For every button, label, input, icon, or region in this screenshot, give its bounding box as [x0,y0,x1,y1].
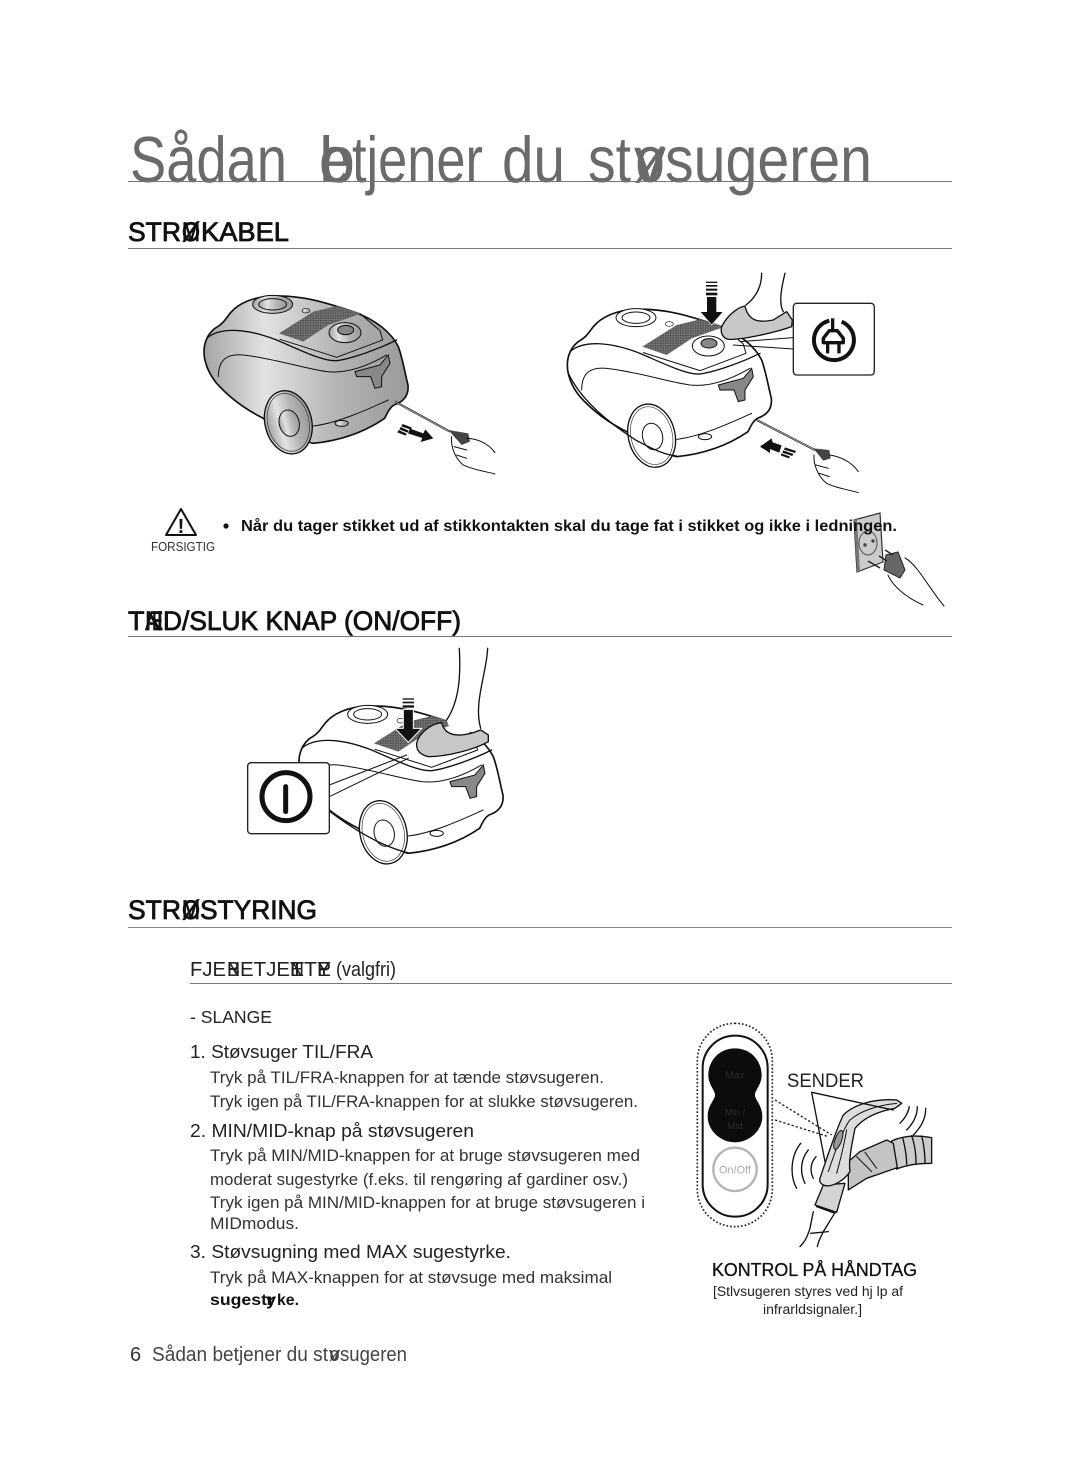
leg and shoe [417,648,488,757]
instructions: y [266,1292,276,1309]
arrow: retract [760,438,796,458]
subheading: remote type: N [227,959,240,981]
title: v [634,123,666,196]
instructions: Tryk igen på TIL/FRA-knappen for at slukke støvsugeren. [210,1093,638,1111]
heading: Tænd/sluk knap: D/SLUK KNAP (ON/OFF) [163,606,461,636]
heading: Tænd/sluk knap [128,606,952,637]
footer: 6 [130,1344,141,1366]
footer: sugeren [340,1344,407,1366]
title: tjener [352,123,483,196]
heading: Strømstyring: M [182,895,200,925]
remote button panel: Mid [727,1121,743,1131]
arrow: press down [700,282,723,325]
subheading: remote type: R [227,959,240,981]
illustration: retracting the power cord with foot [567,273,874,493]
caution icon and label: FORSIGTIG [151,539,215,554]
subheading: remote type: FJE [190,959,226,981]
instructions: r [266,1292,276,1309]
title: sugeren [665,123,872,196]
instructions: 2. MIN/MID-knap på støvsugeren [190,1120,474,1141]
subheading: remote type: E [317,959,331,981]
subheading: remote type: N [290,959,304,981]
signal waves [792,1107,926,1188]
instructions: Tryk på MIN/MID-knappen for at bruge støvsugeren med [210,1147,640,1165]
caption: handle control: [Stlvsugeren styres ved hj lp af [713,1284,903,1299]
heading: Strømstyring: STR [128,895,181,925]
title: du [502,123,565,196]
caption: handle control: infrarldsignaler.] [763,1302,862,1317]
instructions: MIDmodus. [210,1215,299,1233]
heading: Strømkabel: KABEL [201,217,289,247]
cord and plug [395,402,470,445]
leg and shoe [721,273,792,339]
footer: ø [329,1344,340,1366]
footer: Sådan betjener du st [152,1344,328,1366]
subheading: remote type [190,959,952,984]
illustration: wall socket and hand pulling plug [854,513,944,606]
subheading: remote type: B [227,959,240,981]
remote button panel: Min / [725,1108,746,1118]
subheading: remote type: P [317,959,331,981]
caption: handle control [712,1259,917,1317]
subheading: remote type: ETJE [240,959,290,981]
title: ø [634,123,666,196]
remote button panel [697,1023,772,1227]
caption: handle control: KONTROL PÅ HÅNDTAG [712,1259,917,1280]
heading: Strømkabel: Ø [182,217,200,247]
caution icon and label [151,509,215,554]
text: slange label: - SLANGE [190,1007,272,1027]
sender pointer lines [812,1092,893,1162]
label: sender: SENDER [787,1071,864,1092]
subheading: remote type: (valgfri) [336,959,396,981]
heading: Tænd/sluk knap: N [145,606,163,636]
heading: Tænd/sluk knap: T [128,606,144,636]
instructions [190,1041,645,1309]
instructions: Tryk på MAX-knappen for at støvsuge med maksimal [210,1269,612,1287]
illustration: pulling out the power cord [204,295,495,474]
subheading: remote type: T [304,959,317,981]
footer: v [329,1344,340,1366]
hose and handle [800,1100,932,1247]
subheading: remote type: Y [317,959,331,981]
heading: Tænd/sluk knap: Æ [145,606,163,636]
callout: dashed lines [775,1100,832,1137]
subheading: remote type: E [290,959,304,981]
instructions: moderat sugestyrke (f.eks. til rengøring af gardiner osv.) [210,1171,628,1189]
title: Sådan [130,123,287,196]
instructions: 3. Støvsugning med MAX sugestyrke. [190,1241,511,1262]
title [128,123,952,196]
inset: power icon [248,763,329,834]
illustration: on/off pedal press [248,648,503,869]
caution icon and label: ! [178,516,184,538]
title: e [319,123,351,196]
illustration: handle controls [697,1023,932,1247]
heading: Strømkabel [128,217,952,249]
cord and plug [757,420,831,461]
title: b [319,123,355,196]
callout lines [329,755,408,797]
heading: Strømkabel: M [182,217,200,247]
footer [130,1344,407,1366]
heading: Strømkabel: STR [128,217,181,247]
remote button panel: Max [726,1070,744,1081]
instructions: 1. Støvsuger TIL/FRA [190,1041,374,1062]
arrow: press down [395,698,422,742]
heading: Strømstyring: Ø [182,895,200,925]
instructions: Tryk på TIL/FRA-knappen for at tænde støvsugeren. [210,1069,604,1087]
heading: Strømstyring [128,895,952,928]
caution note: Når du tager stikket ud af stikkontakten skal du tage fat i stikket og ikke i ledningen. [241,517,897,535]
subheading: remote type: T [290,959,304,981]
remote button panel: On/Off [719,1165,751,1177]
arrow: pull out [397,424,433,442]
instructions: ke. [277,1292,299,1309]
heading: Strømstyring: STYRING [200,895,317,925]
callout lines [733,338,793,349]
instructions: Tryk igen på MIN/MID-knappen for at bruge støvsugeren i [210,1194,645,1212]
hand [814,455,858,493]
instructions: sugest [210,1292,268,1309]
hand [451,437,495,474]
inset: power cord icon [793,303,874,375]
title: st [588,123,631,196]
